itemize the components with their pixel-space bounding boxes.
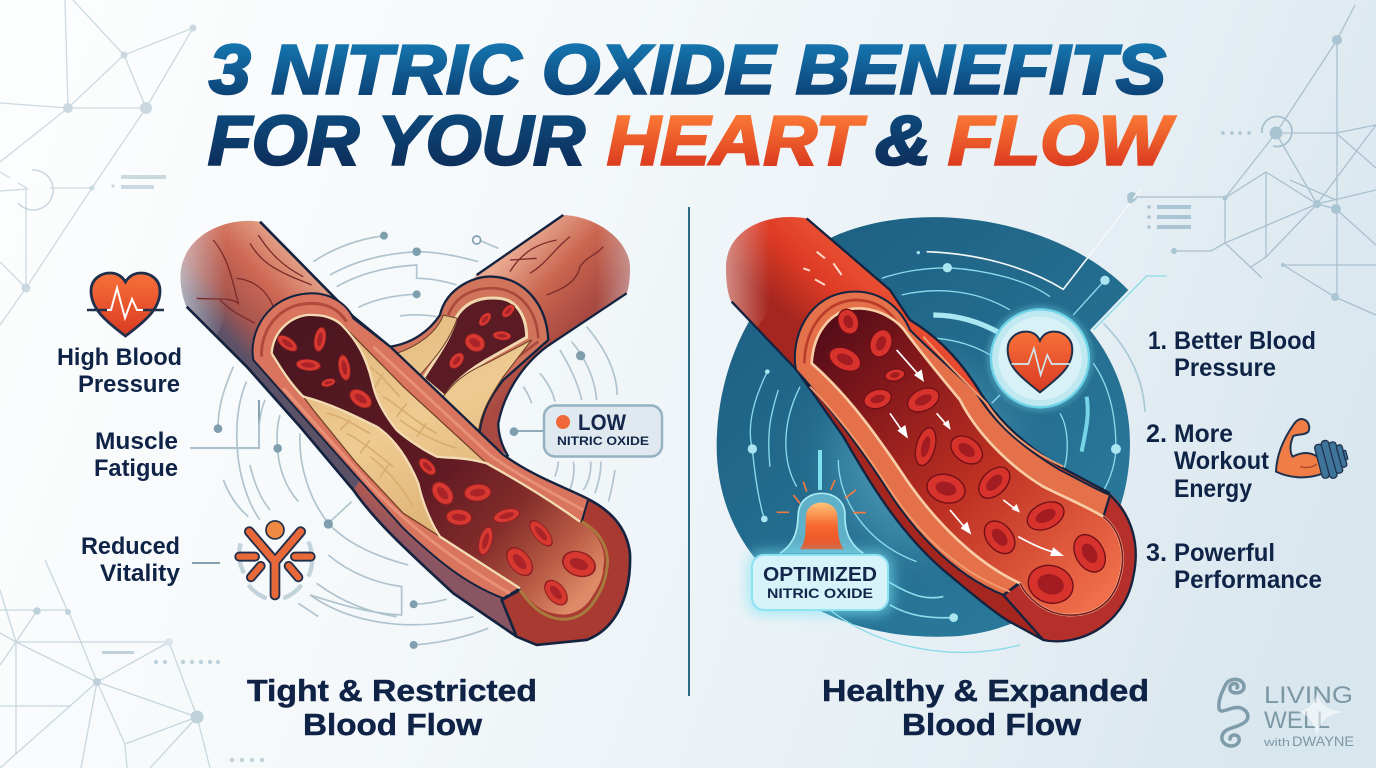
label: muscle fatigue: Muscle	[95, 428, 178, 455]
badge: low nitric oxide	[518, 406, 662, 456]
badge: optimized nitric oxide: OPTIMIZED	[763, 564, 877, 586]
flow arrows	[890, 350, 1064, 556]
label: muscle fatigue	[94, 428, 178, 482]
logo swirl mark	[1219, 679, 1248, 746]
logo: living well with dwayne	[1219, 679, 1354, 749]
title ampersand: &	[875, 102, 931, 180]
badge: optimized nitric oxide	[748, 552, 892, 614]
benefit 2: 2.	[1146, 420, 1167, 448]
benefit 1	[1148, 327, 1316, 382]
benefit 3: 3.	[1146, 539, 1167, 567]
badge: low nitric oxide: NITRIC OXIDE	[557, 434, 649, 448]
benefit 1: Pressure	[1174, 354, 1276, 382]
title line 1: 3 NITRIC OXIDE BENEFITS	[209, 30, 1166, 108]
main artery red blood cells	[275, 326, 599, 609]
main artery cut wall	[253, 293, 588, 598]
divider	[688, 207, 690, 696]
symptom labels	[57, 344, 182, 587]
main artery end face	[502, 498, 630, 645]
healthy red blood cells	[825, 306, 1112, 608]
benefit 2	[1146, 420, 1270, 503]
title line 2 navy: FOR YOUR	[208, 102, 585, 180]
sparkle	[1298, 693, 1344, 736]
label: reduced vitality: Vitality	[100, 560, 181, 587]
benefit 1: Better Blood	[1174, 327, 1316, 355]
title word: flow: FLOW	[948, 102, 1176, 180]
rear artery lumen	[423, 298, 527, 397]
bell icon with rays	[777, 450, 866, 553]
teal circle background	[717, 217, 1130, 637]
title	[208, 30, 1176, 180]
connector lines left	[190, 400, 259, 563]
heading: healthy and expanded: Healthy & Expanded	[822, 673, 1149, 708]
circuit arcs behind left artery	[190, 236, 617, 645]
logo: living well with dwayne: with	[1263, 737, 1290, 749]
left artery illustration	[181, 215, 630, 649]
icon: heart with pulse (left)	[87, 273, 164, 336]
badge: optimized nitric oxide: NITRIC OXIDE	[767, 585, 873, 601]
label: reduced vitality	[81, 533, 181, 587]
rear artery plaque	[397, 315, 532, 433]
logo: living well with dwayne: DWAYNE	[1292, 733, 1354, 749]
heading: tight and restricted: Blood Flow	[303, 707, 483, 742]
benefit 2: Energy	[1174, 475, 1252, 503]
label: reduced vitality: Reduced	[81, 533, 180, 560]
heading: healthy and expanded	[822, 673, 1149, 742]
heading: tight and restricted	[247, 673, 537, 742]
heading: healthy and expanded: Blood Flow	[902, 707, 1082, 742]
benefits list	[1146, 327, 1322, 594]
network: top right	[1127, 5, 1376, 315]
benefit 2: More	[1174, 420, 1233, 448]
vessel end face	[1003, 495, 1136, 641]
rear artery cut wall	[390, 277, 548, 433]
benefit 3	[1146, 539, 1322, 594]
main artery body	[181, 221, 630, 645]
heading: tight and restricted: Tight & Restricted	[247, 673, 537, 708]
heart circle icon	[987, 305, 1093, 412]
label: high blood pressure	[57, 344, 182, 398]
benefit 3: Powerful	[1174, 539, 1275, 567]
benefit 1: 1.	[1148, 327, 1167, 355]
icon: flexed arm with dumbbell	[1276, 419, 1352, 481]
network: bottom left	[0, 560, 264, 768]
vessel lumen	[812, 308, 1123, 615]
logo: living well with dwayne: LIVING	[1264, 682, 1353, 709]
icon: vitality figure	[239, 521, 312, 598]
label: muscle fatigue: Fatigue	[94, 455, 178, 482]
vessel cut wall	[795, 292, 1110, 595]
logo: living well with dwayne: WELL	[1264, 707, 1330, 734]
main vessel body	[726, 217, 1135, 641]
rear artery body	[390, 215, 630, 457]
cyan circuit arcs	[750, 190, 1167, 652]
benefit 3: Performance	[1174, 566, 1322, 594]
rear artery cells	[447, 302, 517, 371]
main artery plaque	[303, 324, 487, 537]
label: high blood pressure: Pressure	[78, 371, 180, 398]
main artery lumen	[272, 315, 604, 614]
title word: heart: HEART	[607, 102, 867, 180]
network: top left	[0, 0, 196, 325]
benefit 2: Workout	[1174, 447, 1270, 475]
badge: low nitric oxide: LOW	[578, 410, 626, 435]
label: high blood pressure: High Blood	[57, 344, 182, 371]
right artery illustration	[717, 190, 1167, 652]
